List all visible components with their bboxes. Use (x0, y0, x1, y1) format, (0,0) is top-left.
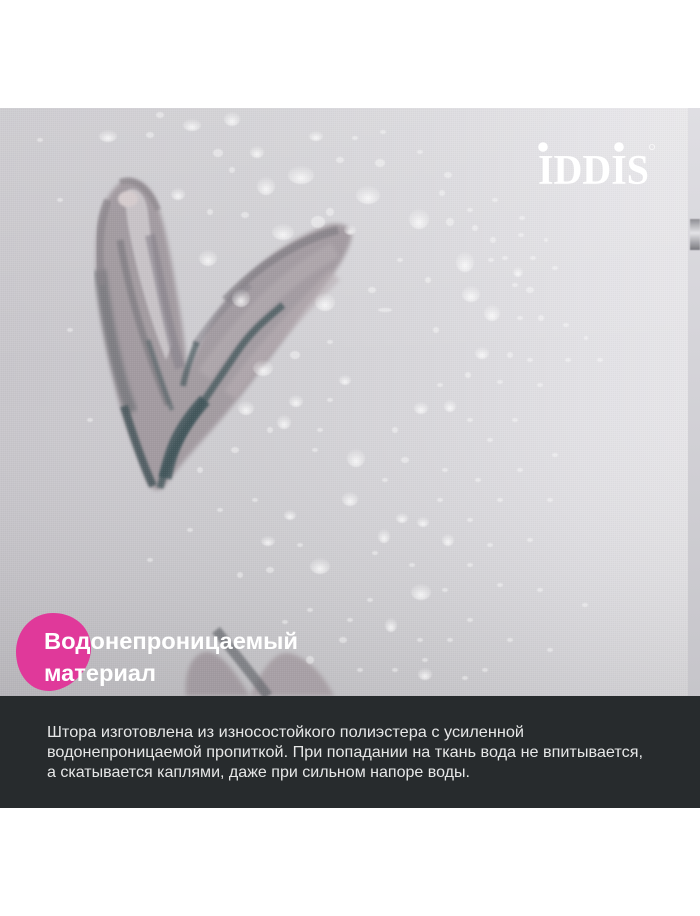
heading: материал (44, 660, 156, 686)
heading (44, 628, 298, 686)
pink circle accent (16, 613, 91, 691)
photo: fabric with water drops (0, 108, 700, 696)
logo: IDDIS: IDDIS (538, 148, 649, 194)
description text: а скатывается каплями, даже при сильном напоре воды. (47, 764, 470, 781)
description text: Штора изготовлена из износостойкого полиэстера с усиленной (47, 724, 524, 741)
panel: description (0, 696, 700, 808)
large water drops (99, 112, 523, 680)
second heart, cropped (186, 630, 334, 696)
chrome rod at the curtain edge (690, 219, 700, 250)
dark marker strokes (124, 406, 153, 486)
small water drops (37, 112, 603, 680)
heading: Водонепроницаемый (44, 628, 298, 654)
fabric weave texture (0, 108, 688, 696)
heart drawing (96, 179, 352, 490)
description text: водонепроницаемой пропиткой. При попадании на ткань вода не впитывается, (47, 744, 643, 761)
description text (47, 724, 643, 781)
